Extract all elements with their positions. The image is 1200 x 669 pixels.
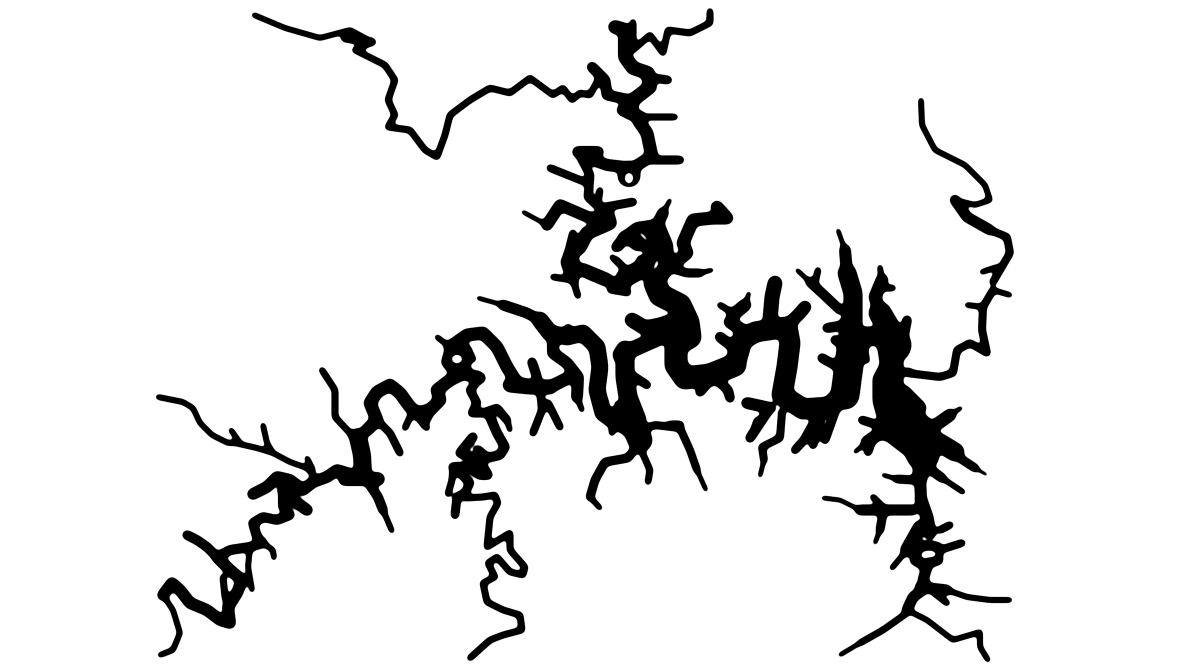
white inlet [866,350,875,407]
eastern lobe [797,100,1010,660]
south-central arm [448,378,525,658]
west arm [158,370,460,655]
dragon-shaped bend and eastern loop [613,200,851,476]
central trunks [478,298,706,508]
upper arc and islets [437,333,570,433]
top northern arm [254,11,710,296]
